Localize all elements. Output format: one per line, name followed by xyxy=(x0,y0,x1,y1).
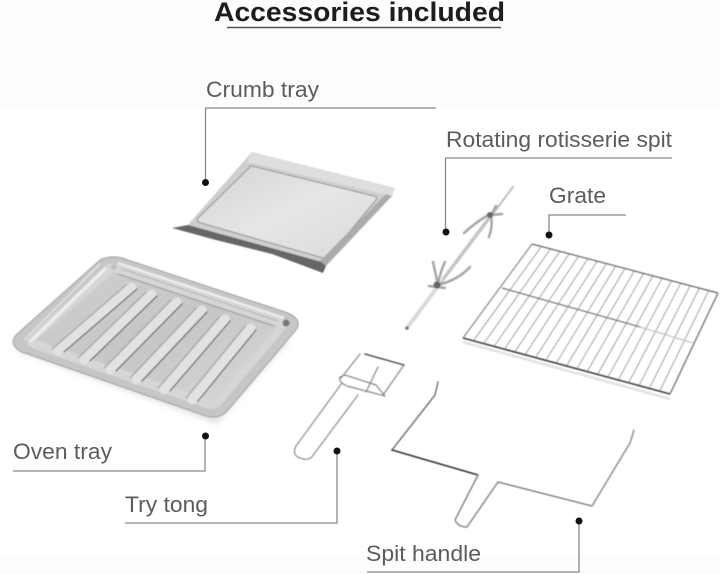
label: spit handle: Spit handle xyxy=(366,541,481,566)
label: crumb tray: Crumb tray xyxy=(206,77,319,102)
grate xyxy=(463,244,718,399)
label: try tong xyxy=(125,448,340,523)
label: rotating rotisserie spit xyxy=(442,127,672,236)
label: oven tray: Oven tray xyxy=(13,439,112,464)
label: rotating rotisserie spit: Rotating rotisserie spit xyxy=(446,127,672,152)
label: crumb tray xyxy=(202,77,436,186)
ridges xyxy=(52,285,256,401)
spit handle xyxy=(392,382,634,527)
label: grate xyxy=(546,183,626,238)
try tong xyxy=(294,354,404,459)
rotisserie spit xyxy=(405,187,513,330)
oven tray xyxy=(13,257,298,424)
crumb tray xyxy=(172,152,395,273)
label: try tong: Try tong xyxy=(125,492,208,517)
label: spit handle xyxy=(366,518,582,572)
label: grate: Grate xyxy=(549,183,606,208)
label: oven tray xyxy=(13,432,209,471)
